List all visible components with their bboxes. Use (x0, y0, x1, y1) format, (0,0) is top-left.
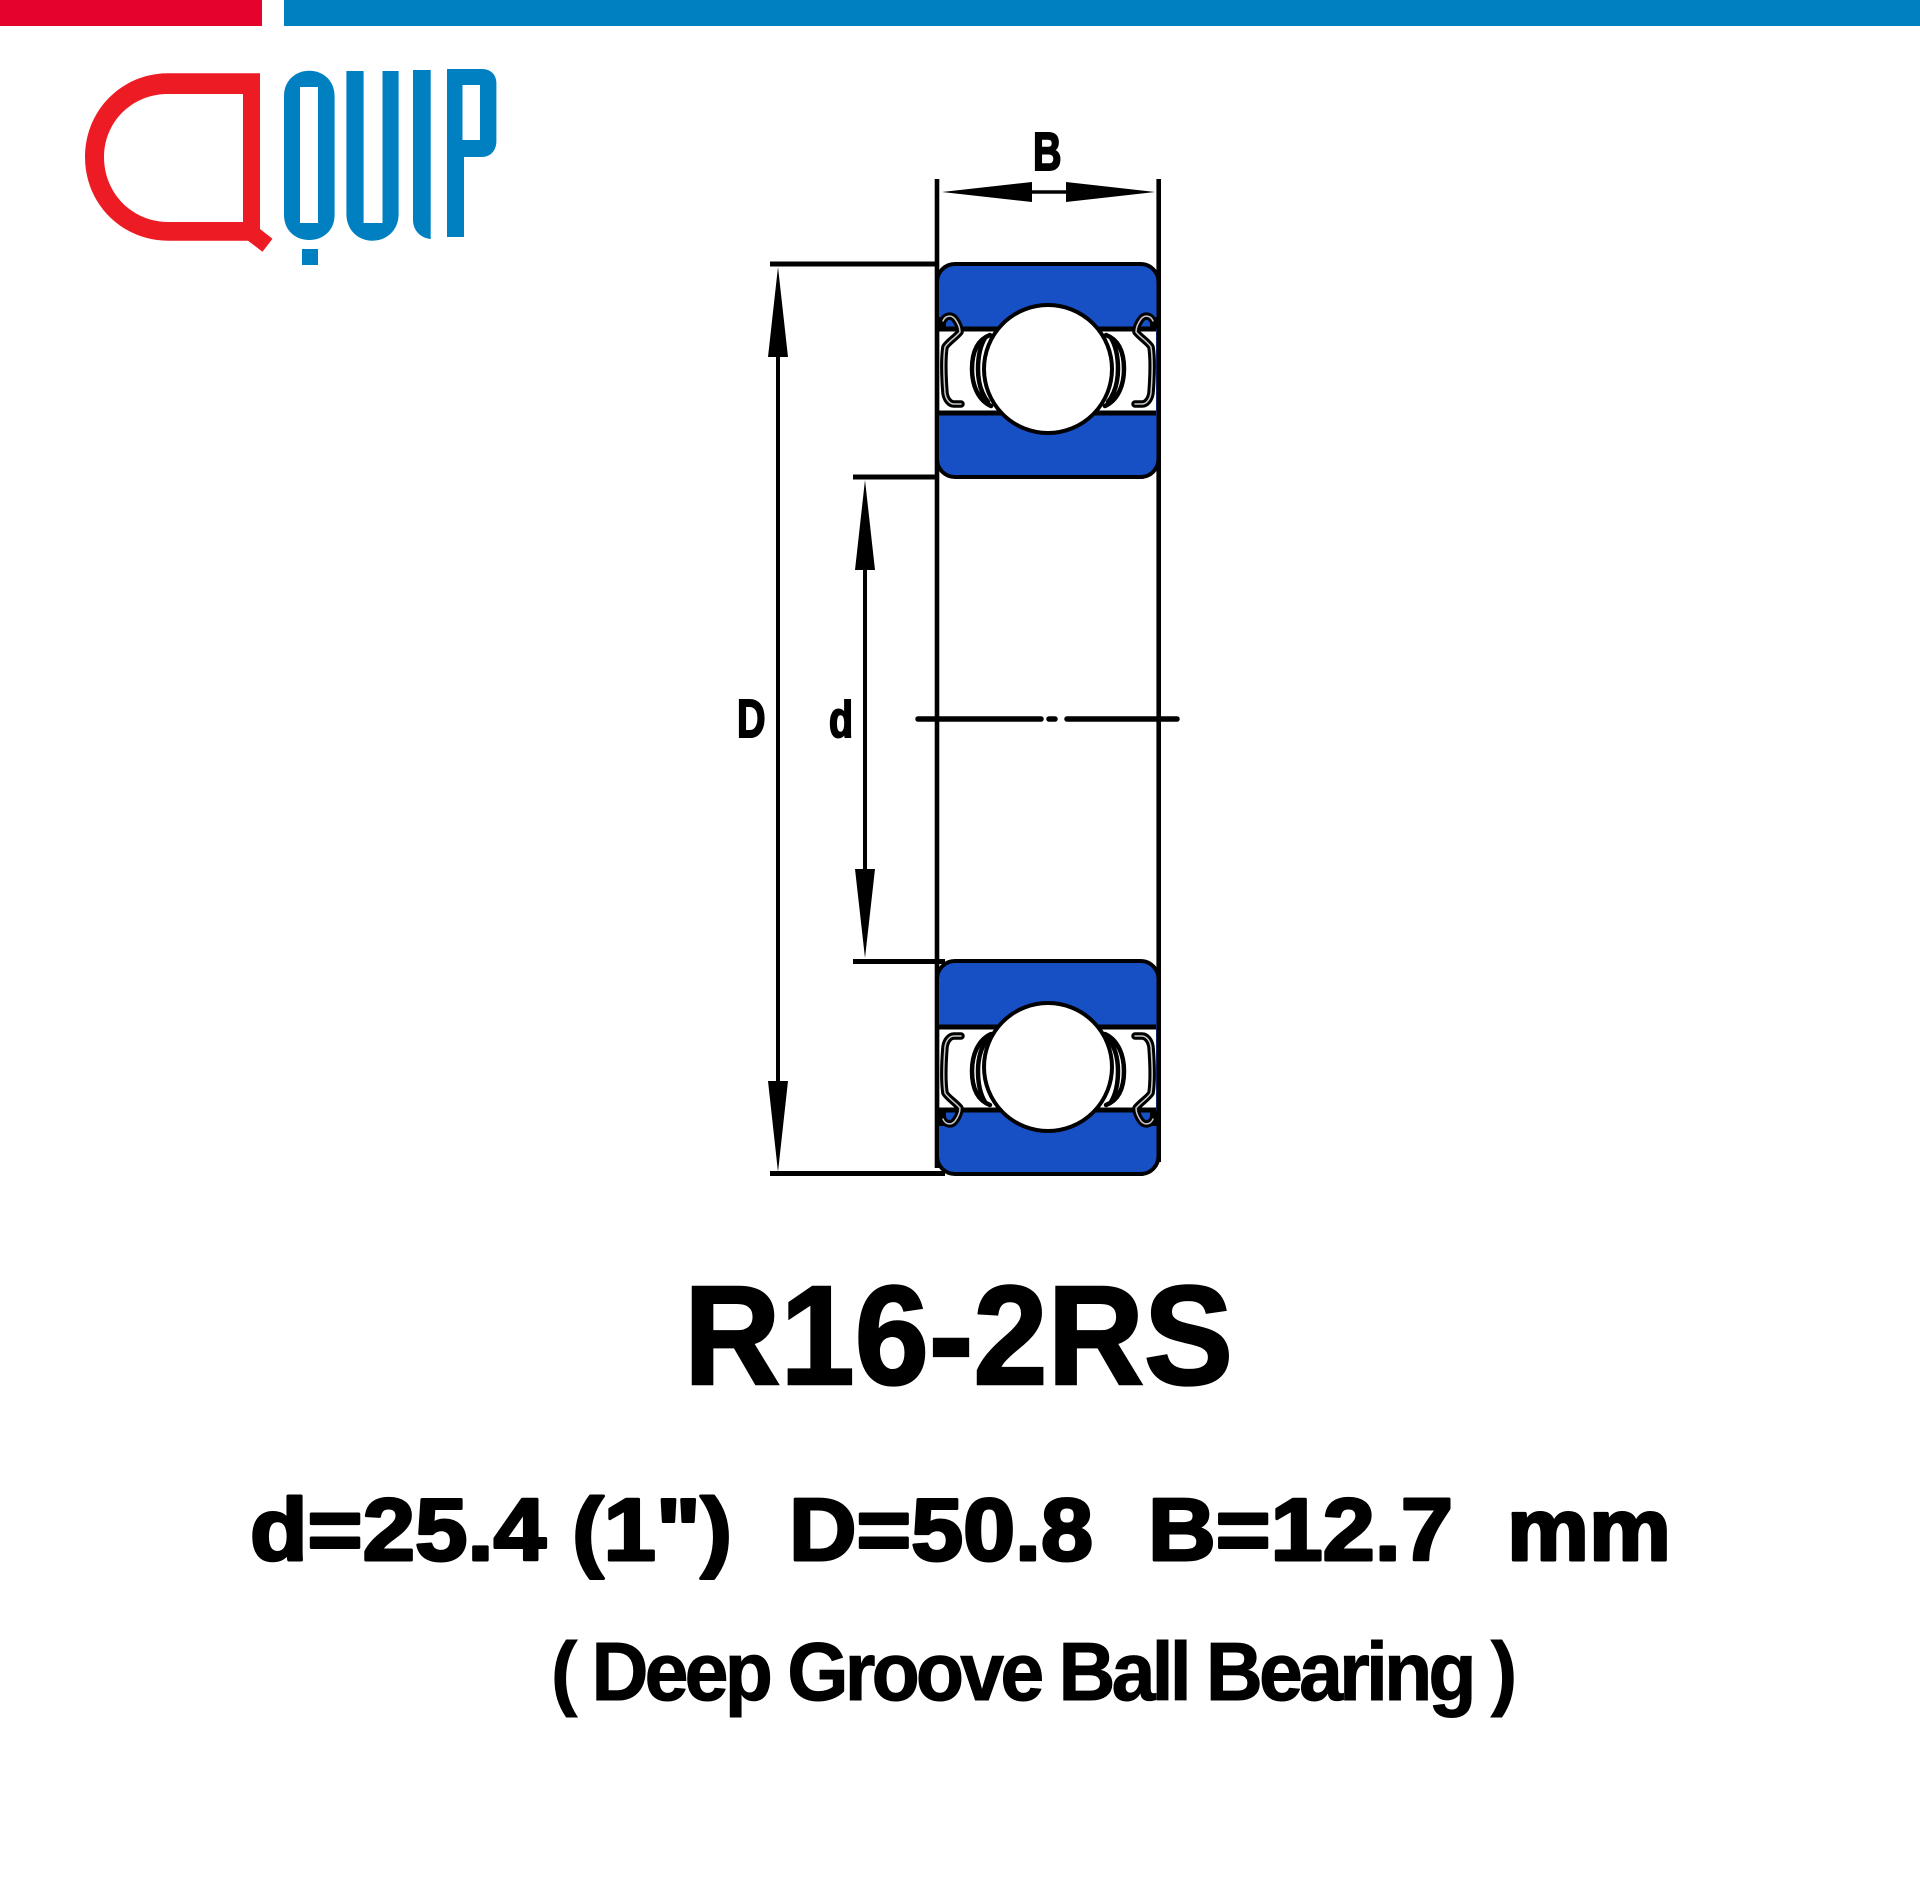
logo: blue letter U (346, 71, 399, 241)
center line (918, 716, 1177, 722)
logo: QUIP (85, 69, 496, 265)
extension lines (937, 179, 1159, 1168)
spec: unit: mm (1507, 1480, 1671, 1579)
outer diameter reference lines (770, 264, 945, 1174)
spec: inner diameter: d=25.4 (1") (250, 1480, 732, 1579)
label D: D (737, 689, 766, 749)
title: R16-2RS (684, 1256, 1233, 1414)
inner diameter reference lines (853, 477, 945, 962)
logo: blue letter I (413, 70, 431, 239)
logo: blue Q dot (302, 249, 318, 265)
dimension drawing (737, 122, 1177, 1174)
spec: width: B=12.7 (1148, 1480, 1453, 1579)
label d: d (829, 691, 853, 748)
specifications line (250, 1480, 1671, 1579)
spec: outer diameter: D=50.8 (789, 1480, 1093, 1579)
logo: red Q mark (85, 73, 272, 252)
logo: blue letter Q (284, 71, 335, 240)
arrow: width B (942, 182, 1155, 202)
logo: blue letter P (447, 69, 496, 237)
label B: B (1033, 122, 1062, 182)
bearing type description: ( Deep Groove Ball Bearing ) (551, 1626, 1517, 1718)
top bar: blue segment (284, 0, 1920, 26)
bearing cross-section: top (937, 264, 1159, 477)
arrow: inner diameter d (855, 480, 875, 958)
arrow: outer diameter D (768, 267, 788, 1172)
bearing cross-section: bottom (937, 961, 1159, 1174)
top bar: red segment (0, 0, 262, 26)
